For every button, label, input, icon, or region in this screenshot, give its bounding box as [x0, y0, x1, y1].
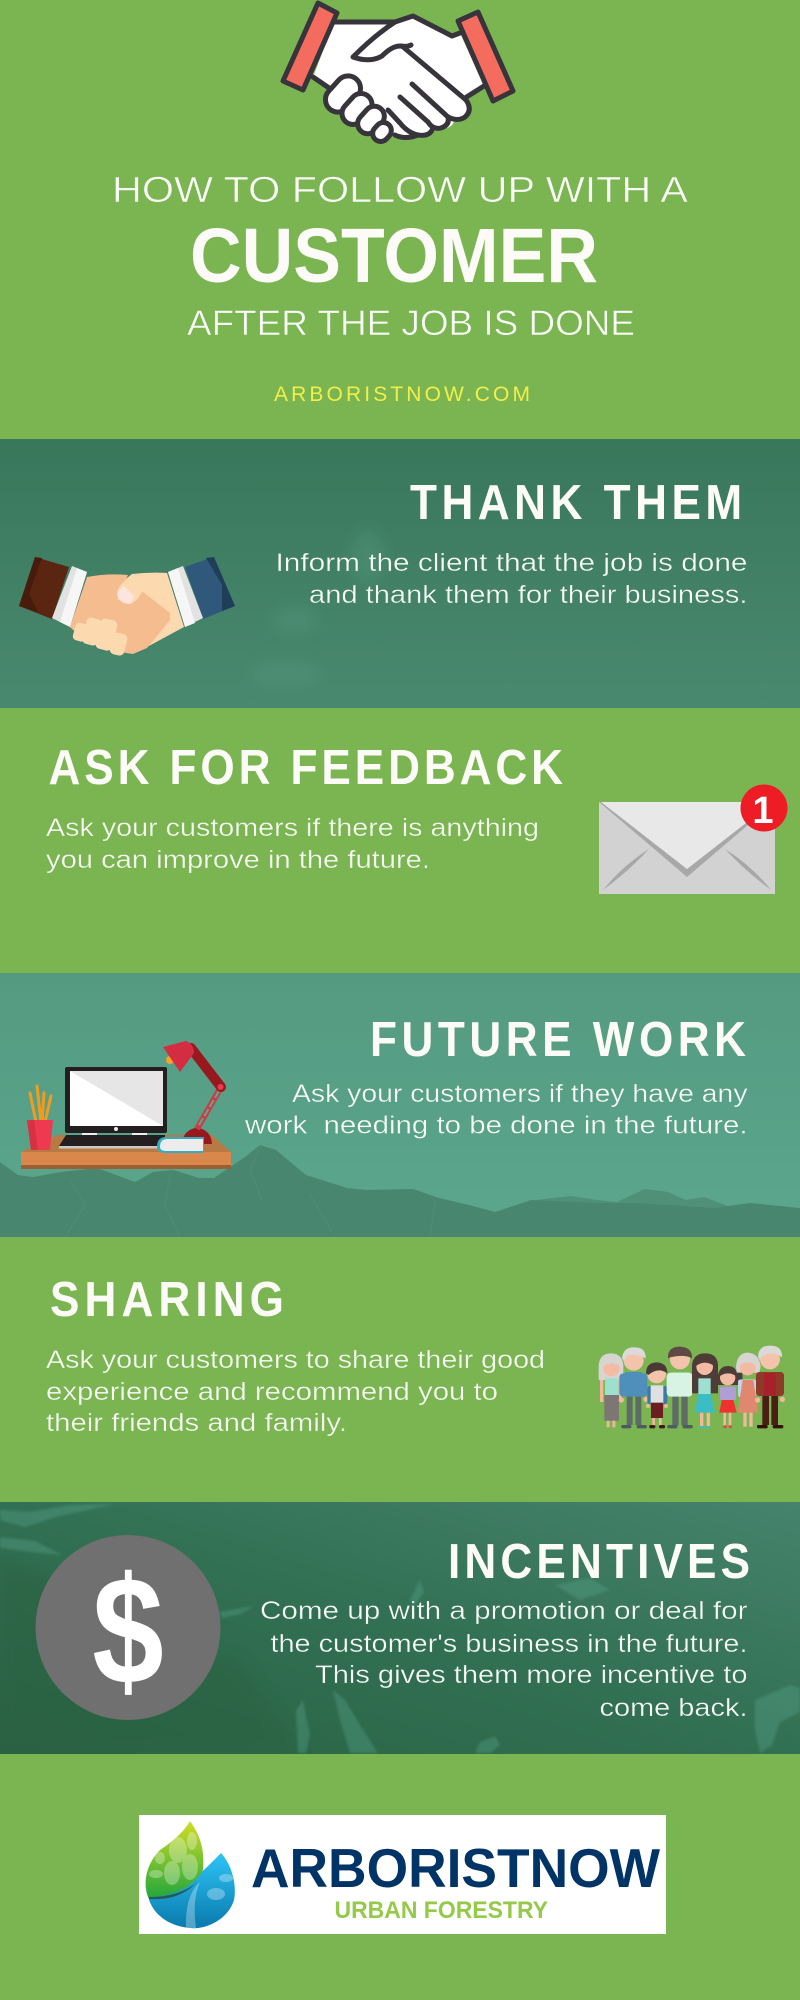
- figure: second grandmother: [736, 1353, 761, 1427]
- body text: Ask your customers if there is anything: [46, 814, 539, 842]
- body text: Ask your customers to share their good: [46, 1346, 545, 1374]
- website url: ARBORISTNOW.COM: [274, 383, 530, 406]
- icon: dollar coin: [36, 1535, 220, 1720]
- body text: work needing to be done in the future.: [244, 1112, 748, 1140]
- aerial landscape texture: [0, 1504, 800, 1754]
- body text: Come up with a promotion or deal for: [260, 1597, 748, 1625]
- logo tagline: URBAN FORESTRY: [334, 1897, 548, 1924]
- heading: THANK THEM: [410, 475, 742, 530]
- body text: you can improve in the future.: [46, 846, 430, 874]
- body text: [46, 814, 539, 874]
- panel background: [0, 1502, 800, 1754]
- figure: grandfather: [619, 1347, 649, 1428]
- body text: experience and recommend you to: [46, 1378, 498, 1406]
- icon: envelope with notification: 1: [752, 790, 774, 832]
- header panel: [112, 3, 688, 406]
- footer logo: [139, 1815, 666, 1934]
- body text: This gives them more incentive to: [315, 1661, 748, 1689]
- logo background: [139, 1815, 666, 1934]
- logo icon: leaf and water drop: [146, 1821, 235, 1928]
- mountains: [0, 1145, 800, 1237]
- body text: Ask your customers if they have any: [292, 1080, 748, 1108]
- panel: sharing: [0, 1237, 800, 1502]
- heading: INCENTIVES: [448, 1534, 750, 1589]
- title line 2: CUSTOMER: [190, 213, 598, 299]
- panel: thank them: [0, 439, 800, 708]
- icon: family group: [599, 1346, 785, 1428]
- panel background: [0, 439, 800, 708]
- heading: SHARING: [50, 1272, 284, 1327]
- panel: future work: [0, 973, 800, 1237]
- body text: [276, 549, 748, 609]
- figure: grandmother: [599, 1353, 623, 1427]
- body text: their friends and family.: [46, 1409, 347, 1437]
- figure: mother: [692, 1353, 718, 1428]
- heading: FUTURE WORK: [370, 1012, 746, 1067]
- title line 3: AFTER THE JOB IS DONE: [187, 304, 635, 343]
- panel: incentives: [0, 1502, 800, 1754]
- body text: Inform the client that the job is done: [276, 549, 748, 577]
- logo wordmark: ARBORISTNOW: [251, 1837, 660, 1899]
- icon: handshake with suits: [19, 557, 235, 657]
- figure: boy: [646, 1362, 668, 1428]
- body text: come back.: [600, 1694, 748, 1722]
- figure: girl: [718, 1366, 738, 1428]
- body text: [244, 1080, 748, 1140]
- background clouds: [249, 528, 386, 686]
- panel: ask for feedback: [0, 708, 800, 973]
- body text: [46, 1346, 545, 1437]
- body text: the customer's business in the future.: [270, 1630, 748, 1658]
- panel background: [0, 708, 800, 973]
- title line 1: HOW TO FOLLOW UP WITH A: [112, 169, 688, 210]
- icon: dollar coin: $: [92, 1545, 164, 1716]
- panel background: [0, 1237, 800, 1502]
- icon: desk with laptop, lamp, pencils and book: [21, 1041, 231, 1169]
- panel background: [0, 973, 800, 1237]
- figure: second grandfather: [755, 1346, 785, 1428]
- icon: envelope with notification: [599, 784, 788, 894]
- figure: father: [667, 1347, 693, 1428]
- body text: [260, 1597, 748, 1722]
- heading: ASK FOR FEEDBACK: [48, 740, 563, 795]
- body text: and thank them for their business.: [309, 581, 748, 609]
- icon: line handshake: [283, 3, 513, 145]
